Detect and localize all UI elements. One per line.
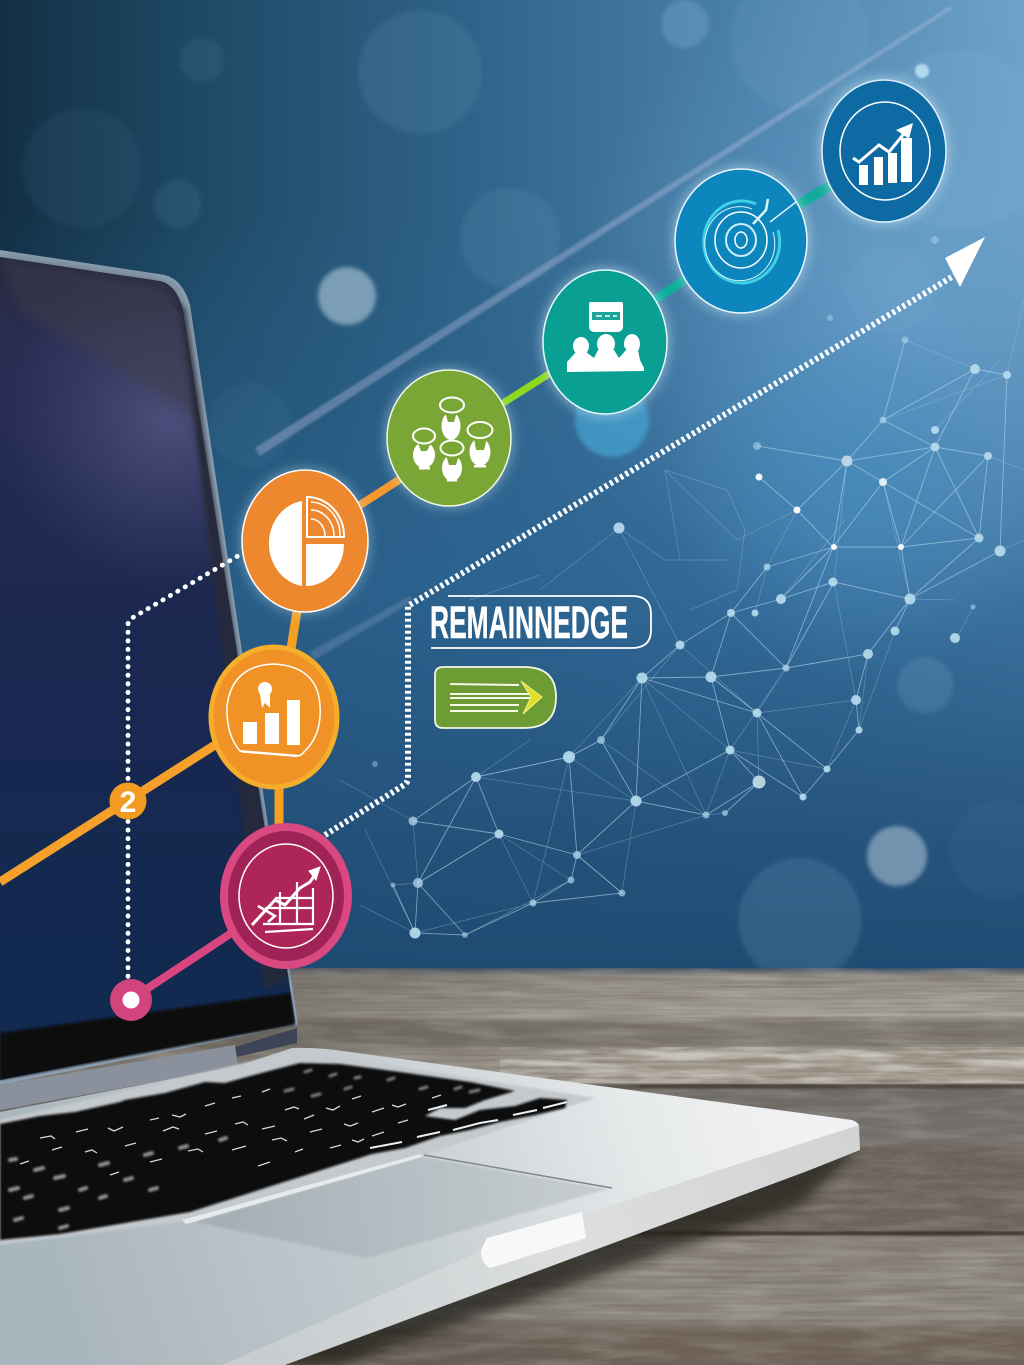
laptop base deck xyxy=(0,1048,859,1365)
icon: bars with rising arrow xyxy=(853,123,913,185)
hinge xyxy=(0,1045,238,1110)
icon: screen and audience xyxy=(567,302,644,372)
green arrow button xyxy=(435,667,556,728)
laptop shadow on table xyxy=(250,1150,859,1365)
step 2: award bars node xyxy=(211,647,337,787)
laptop lid and screen xyxy=(0,250,300,1085)
key highlights xyxy=(20,1089,441,1175)
connecting path: coloured segments xyxy=(0,182,836,1000)
start node xyxy=(110,979,152,1021)
trackpad xyxy=(196,1157,608,1258)
dotted line: main rising arrow xyxy=(325,237,985,835)
badge: number 2: 2 xyxy=(120,786,136,819)
dotted line: left route xyxy=(128,553,243,985)
icon: pie chart xyxy=(269,497,344,586)
icon: target with dart xyxy=(704,199,796,283)
step 3: pie chart node xyxy=(240,468,370,614)
laptop front edge xyxy=(222,1125,860,1365)
title label xyxy=(430,596,651,648)
keyboard well xyxy=(0,1050,595,1245)
blurred keys xyxy=(10,1138,226,1228)
icon: speed lines and arrow xyxy=(450,681,542,714)
title label: REMAINNEDGE xyxy=(430,597,628,648)
network constellation xyxy=(340,236,1024,938)
keyboard xyxy=(0,1063,567,1240)
wooden table xyxy=(0,968,1024,1365)
step 6: target node xyxy=(673,167,809,315)
step 1: growth grid node xyxy=(224,827,348,965)
laptop xyxy=(0,250,860,1365)
icon: bars and rosette xyxy=(240,682,300,757)
icon: four people with speech heads xyxy=(413,398,492,482)
laptop latch xyxy=(481,1212,586,1268)
badge: number 2 xyxy=(110,782,146,820)
icon: grid chart with arrow xyxy=(252,867,320,932)
background: blue bokeh wall xyxy=(0,0,1024,985)
step 4: discussion group node xyxy=(385,368,513,508)
step 7: growth chart node xyxy=(820,78,948,224)
step 5: team presentation node xyxy=(541,268,669,416)
faint diagonal light lines xyxy=(255,6,952,660)
trackpad highlight xyxy=(182,1154,422,1224)
arrowhead xyxy=(945,237,985,287)
